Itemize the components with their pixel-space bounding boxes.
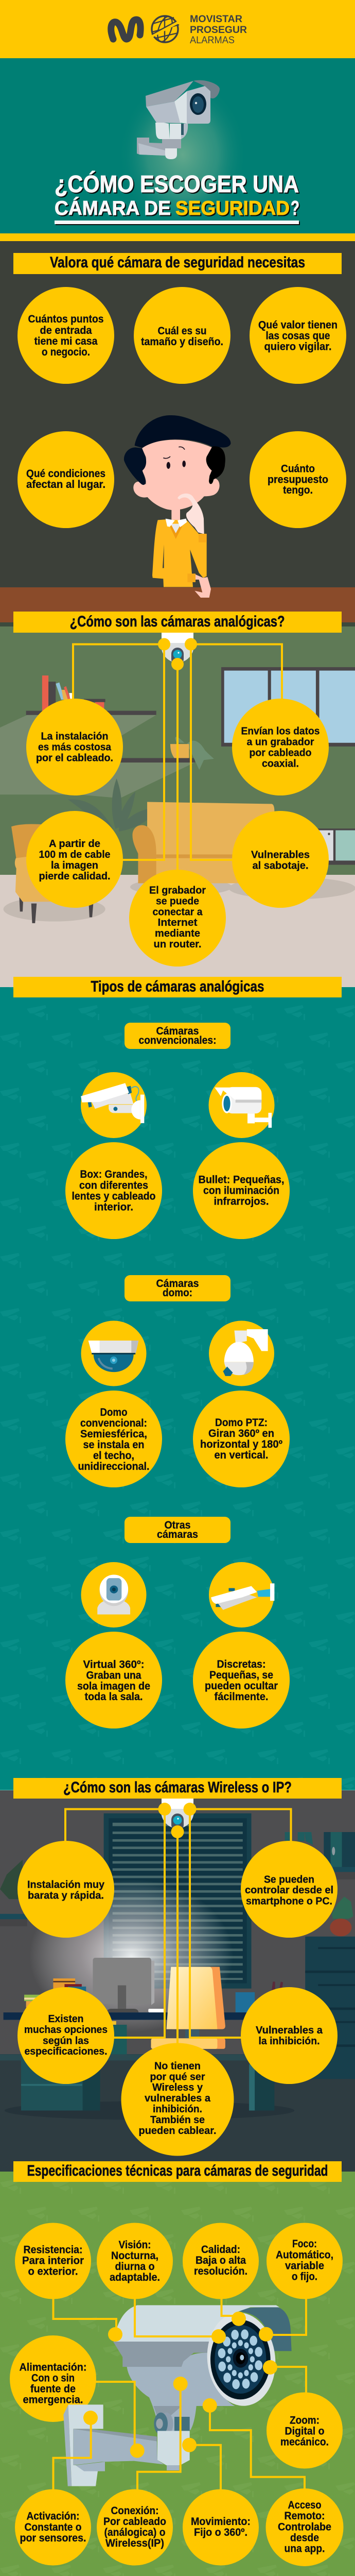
callout: cable length: la imagen bbox=[51, 860, 98, 871]
callout: focus: Automático, bbox=[276, 2249, 333, 2261]
label: conventional cameras: Cámaras bbox=[156, 1025, 199, 1037]
callout: bullet: con iluminación bbox=[203, 1185, 279, 1196]
callout: zoom: Zoom: bbox=[290, 2414, 319, 2427]
callout: size and design: Cuál es su bbox=[157, 325, 207, 337]
callout: remote access: desde bbox=[290, 2532, 319, 2544]
label: dome cameras bbox=[125, 1275, 230, 1301]
label: dome cameras: Cámaras bbox=[156, 1278, 199, 1290]
callout: movement: Movimiento: bbox=[191, 2516, 251, 2528]
callout: discreet bbox=[193, 1632, 290, 1728]
callout: box bbox=[65, 1142, 162, 1239]
callout: conventional dome: el techo, bbox=[93, 1450, 134, 1462]
callout: remote control: Se pueden bbox=[264, 1874, 314, 1886]
callout: virtual 360: Graban una bbox=[86, 1670, 141, 1682]
label: other cameras: cámaras bbox=[157, 1529, 198, 1540]
callout: value of items bbox=[250, 287, 346, 384]
office illustration bbox=[0, 1814, 355, 2120]
callout: remote access bbox=[265, 2488, 344, 2566]
callout: entry points bbox=[17, 287, 114, 384]
callout: many options: Existen bbox=[48, 2013, 83, 2025]
title: ¿CÓMO ESCOGER UNA bbox=[55, 171, 299, 197]
title: SEGURIDAD bbox=[175, 197, 290, 219]
callout: connection: Conexión: bbox=[111, 2505, 158, 2517]
callout: zoom: mecánico. bbox=[280, 2436, 329, 2448]
header band with logo bbox=[0, 0, 355, 58]
callout: activation: Constante o bbox=[25, 2521, 81, 2533]
callout: entry points: de entrada bbox=[40, 325, 92, 336]
callout: focus bbox=[267, 2223, 343, 2299]
callout: vision: Visión: bbox=[118, 2239, 151, 2251]
panel: assess which camera you need bbox=[0, 233, 355, 622]
callout: quality: resolución. bbox=[194, 2265, 247, 2277]
callout: connection: Por cableado bbox=[103, 2516, 166, 2528]
callout: remote access: Acceso bbox=[288, 2499, 321, 2511]
callout: dome PTZ: Giran 360º en bbox=[208, 1428, 274, 1439]
callout: sabotage bbox=[232, 811, 329, 908]
callout: need not be wireless: vulnerables a bbox=[145, 2093, 211, 2104]
callout: remote access: Remoto: bbox=[284, 2510, 325, 2522]
callout: recorder and router: un router. bbox=[153, 939, 202, 950]
callout: entry points: o negocio. bbox=[42, 346, 90, 358]
connector lines bbox=[54, 2298, 306, 2490]
callout: activation bbox=[15, 2489, 91, 2566]
callout: resistance: o exterior. bbox=[28, 2266, 78, 2278]
icon: box camera bbox=[81, 1072, 147, 1138]
callout: need not be wireless: Wireless y bbox=[152, 2082, 203, 2093]
heading bbox=[13, 253, 342, 274]
callout: installation cost: por el cableado. bbox=[36, 753, 113, 764]
callout: box: Box: Grandes, bbox=[80, 1168, 147, 1180]
callout: resistance: Resistencia: bbox=[24, 2244, 82, 2256]
heading bbox=[13, 977, 342, 997]
callout: discreet: Discretas: bbox=[217, 1658, 265, 1670]
callout: installation cost: La instalación bbox=[41, 731, 108, 742]
callout: zoom: Digital o bbox=[285, 2426, 324, 2437]
callout: size and design: tamaño y diseño. bbox=[141, 336, 223, 348]
icon: discreet camera bbox=[209, 1562, 274, 1628]
connector dots bbox=[158, 638, 197, 670]
callout: dome PTZ: en vertical. bbox=[214, 1449, 269, 1461]
callout: need not be wireless: por qué ser bbox=[150, 2072, 205, 2083]
icon: Prosegur globe logo bbox=[152, 14, 179, 44]
callout: recorder and router bbox=[129, 870, 226, 967]
title bbox=[55, 171, 299, 224]
callout: recorder and router: conectar a bbox=[152, 907, 203, 918]
callout: value of items: las cosas que bbox=[265, 330, 330, 342]
callout: remote control: smartphone o PC. bbox=[246, 1896, 332, 1907]
callout: budget: Cuánto bbox=[281, 463, 315, 475]
callout: discreet: pueden ocultar bbox=[205, 1680, 278, 1692]
callout: zoom bbox=[267, 2393, 343, 2469]
icon: virtual 360 camera bbox=[81, 1562, 146, 1628]
callout: jamming: Vulnerables a bbox=[256, 2025, 323, 2036]
callout: conventional dome: Domo bbox=[100, 1406, 128, 1418]
callout: conditions: Qué condiciones bbox=[26, 468, 105, 480]
callout: many options bbox=[17, 1987, 114, 2084]
callout: power bbox=[10, 2335, 96, 2422]
character: thinking man bbox=[124, 415, 230, 598]
callout: resistance bbox=[15, 2223, 91, 2299]
callout: conventional dome: convencional: bbox=[80, 1417, 147, 1429]
callout: data to recorder: por cableado bbox=[249, 748, 312, 759]
callout: need not be wireless: pueden cablear. bbox=[139, 2125, 216, 2137]
callout: conditions: afectan al lugar. bbox=[26, 479, 105, 490]
logo text: PROSEGUR bbox=[190, 25, 247, 36]
icon: ceiling dome camera bbox=[161, 1799, 194, 1831]
callout: box: interior. bbox=[94, 1201, 133, 1213]
callout: vision bbox=[97, 2223, 173, 2299]
callout: cheap install: Instalación muy bbox=[27, 1879, 105, 1891]
callout: need not be wireless bbox=[121, 2043, 234, 2156]
callout: sabotage: Vulnerables bbox=[251, 850, 310, 861]
callout: value of items: Qué valor tienen bbox=[258, 319, 338, 331]
heading bbox=[13, 612, 342, 633]
callout: connection: (análogica) o bbox=[104, 2527, 166, 2538]
callout: conventional dome: unidireccional. bbox=[78, 1461, 149, 1472]
callout: data to recorder: Envían los datos bbox=[241, 725, 320, 737]
icon: Movistar M logo bbox=[111, 20, 140, 39]
callout: bullet bbox=[193, 1142, 290, 1239]
callout: installation cost: es más costosa bbox=[38, 742, 112, 753]
callout: data to recorder: a un grabador bbox=[247, 737, 314, 748]
callout: box: lentes y cableado bbox=[72, 1191, 155, 1202]
callout: recorder and router: se puede bbox=[156, 895, 199, 907]
connector lines bbox=[65, 1809, 291, 2045]
room illustration bbox=[0, 667, 355, 923]
callout: focus: o fijo. bbox=[292, 2271, 317, 2282]
callout: discreet: Pequeñas, se bbox=[209, 1669, 273, 1681]
callout: virtual 360: sola imagen de bbox=[77, 1681, 150, 1692]
callout: cable length: pierde calidad. bbox=[39, 871, 110, 882]
callout: recorder and router: El grabador bbox=[149, 885, 206, 896]
callout: bullet: infrarrojos. bbox=[214, 1195, 269, 1208]
icon: ceiling dome camera bbox=[161, 633, 194, 665]
callout: need not be wireless: inhibición. bbox=[153, 2104, 202, 2115]
callout: budget bbox=[250, 431, 346, 528]
callout: conditions bbox=[17, 431, 114, 528]
title: CÁMARA DE bbox=[55, 197, 171, 219]
callout: activation: Activación: bbox=[27, 2511, 79, 2522]
callout: box: con diferentes bbox=[79, 1180, 148, 1192]
callout: quality: Baja o alta bbox=[196, 2255, 246, 2266]
hero panel bbox=[0, 58, 355, 233]
callout: entry points: tiene mi casa bbox=[34, 335, 98, 347]
connector dots bbox=[158, 1803, 197, 1838]
callout: budget: presupuesto bbox=[268, 474, 328, 485]
panel: types of analog cameras bbox=[0, 977, 355, 1790]
callout: dome PTZ bbox=[193, 1391, 290, 1487]
callout: power: fuente de bbox=[30, 2383, 76, 2395]
callout: focus: Foco: bbox=[292, 2238, 317, 2250]
callout: power: Alimentación: bbox=[20, 2361, 86, 2373]
icon: bullet camera bbox=[209, 1072, 275, 1138]
callout: cable length: 100 m de cable bbox=[39, 849, 110, 860]
logo text: ALARMAS bbox=[190, 35, 235, 46]
callout: cheap install bbox=[17, 1841, 114, 1938]
callout: virtual 360 bbox=[65, 1632, 162, 1728]
callout: remote access: Controlabe bbox=[278, 2521, 331, 2533]
callout: jamming bbox=[241, 1987, 338, 2084]
callout: dome PTZ: horizontal y 180º bbox=[200, 1438, 282, 1450]
panel: analog room scene bbox=[0, 612, 355, 987]
heading: Tipos de cámaras analógicas bbox=[91, 978, 264, 995]
callout: quality bbox=[183, 2223, 259, 2299]
callout: power: emergencia. bbox=[23, 2394, 83, 2405]
logo text: MOVISTAR bbox=[190, 14, 242, 25]
callout: cheap install: barata y rápida. bbox=[28, 1890, 104, 1902]
callout: bullet: Bullet: Pequeñas, bbox=[199, 1174, 284, 1186]
heading: Valora qué cámara de seguridad necesitas bbox=[50, 254, 305, 271]
camera illustration bbox=[63, 2305, 292, 2486]
callout: entry points: Cuántos puntos bbox=[28, 313, 104, 325]
callout: cable length bbox=[26, 811, 123, 908]
callout: virtual 360: Virtual 360º: bbox=[83, 1659, 144, 1671]
callout: quality: Calidad: bbox=[201, 2244, 240, 2256]
connector lines bbox=[73, 644, 282, 872]
callout: vision: Nocturna, bbox=[111, 2250, 158, 2262]
callout: size and design bbox=[134, 287, 230, 384]
label: conventional cameras bbox=[125, 1023, 230, 1049]
heading: ¿Cómo son las cámaras analógicas? bbox=[70, 613, 285, 630]
callout: power: Con o sin bbox=[31, 2372, 75, 2384]
callout: data to recorder bbox=[232, 699, 329, 795]
callout: connection bbox=[97, 2489, 173, 2566]
callout: need not be wireless: No tienen bbox=[154, 2061, 201, 2072]
callout: recorder and router: Internet bbox=[157, 917, 198, 928]
callout: many options: muchas opciones bbox=[24, 2024, 108, 2036]
callout: remote control bbox=[241, 1841, 338, 1938]
callout: data to recorder: coaxial. bbox=[262, 758, 299, 770]
logo text bbox=[190, 14, 247, 46]
callout: installation cost bbox=[26, 699, 123, 795]
label: other cameras bbox=[125, 1517, 230, 1543]
callout: recorder and router: mediante bbox=[155, 928, 200, 939]
title: ? bbox=[291, 197, 299, 219]
icon: PTZ dome bbox=[209, 1321, 274, 1386]
panel: wireless office scene bbox=[0, 1778, 355, 2172]
callout: movement bbox=[183, 2489, 259, 2566]
callout: budget: tengo. bbox=[283, 484, 313, 496]
callout: many options: según las bbox=[43, 2035, 89, 2046]
callout: conventional dome bbox=[65, 1391, 162, 1487]
heading bbox=[13, 1778, 342, 1799]
callout: movement: Fijo o 360º. bbox=[194, 2527, 247, 2538]
heading: ¿Cómo son las cámaras Wireless o IP? bbox=[63, 1779, 292, 1796]
callout: resistance: Para interior bbox=[22, 2255, 84, 2267]
callout: conventional dome: se instala en bbox=[83, 1439, 144, 1451]
callout: focus: variable bbox=[285, 2260, 324, 2272]
callout: cable length: A partir de bbox=[49, 838, 100, 850]
callout: vision: diurna o bbox=[115, 2261, 154, 2273]
callout: remote access: una app. bbox=[284, 2543, 325, 2555]
callout: vision: adaptable. bbox=[110, 2272, 160, 2283]
callout: jamming: la inhibición. bbox=[258, 2036, 320, 2047]
callout: conventional dome: Semiesférica, bbox=[80, 1428, 147, 1440]
connector dots bbox=[83, 2312, 277, 2458]
icon: conventional dome bbox=[81, 1321, 146, 1386]
callout: connection: Wireless(IP) bbox=[105, 2537, 164, 2549]
callout: dome PTZ: Domo PTZ: bbox=[215, 1417, 268, 1429]
callout: sabotage: al sabotaje. bbox=[252, 860, 309, 872]
callout: remote control: controlar desde el bbox=[245, 1885, 333, 1896]
callout: many options: especificaciones. bbox=[25, 2046, 107, 2057]
label: other cameras: Otras bbox=[165, 1519, 190, 1531]
callout: need not be wireless: También se bbox=[150, 2114, 205, 2126]
callout: discreet: fácilmente. bbox=[214, 1691, 269, 1703]
label: dome cameras: domo: bbox=[163, 1287, 192, 1299]
callout: activation: por sensores. bbox=[20, 2532, 86, 2544]
icon: security camera bbox=[137, 80, 220, 159]
panel: technical specifications bbox=[0, 2161, 355, 2576]
callout: value of items: quiero vigilar. bbox=[264, 341, 331, 352]
label: conventional cameras: convencionales: bbox=[139, 1035, 216, 1046]
callout: virtual 360: toda la sala. bbox=[84, 1691, 143, 1703]
